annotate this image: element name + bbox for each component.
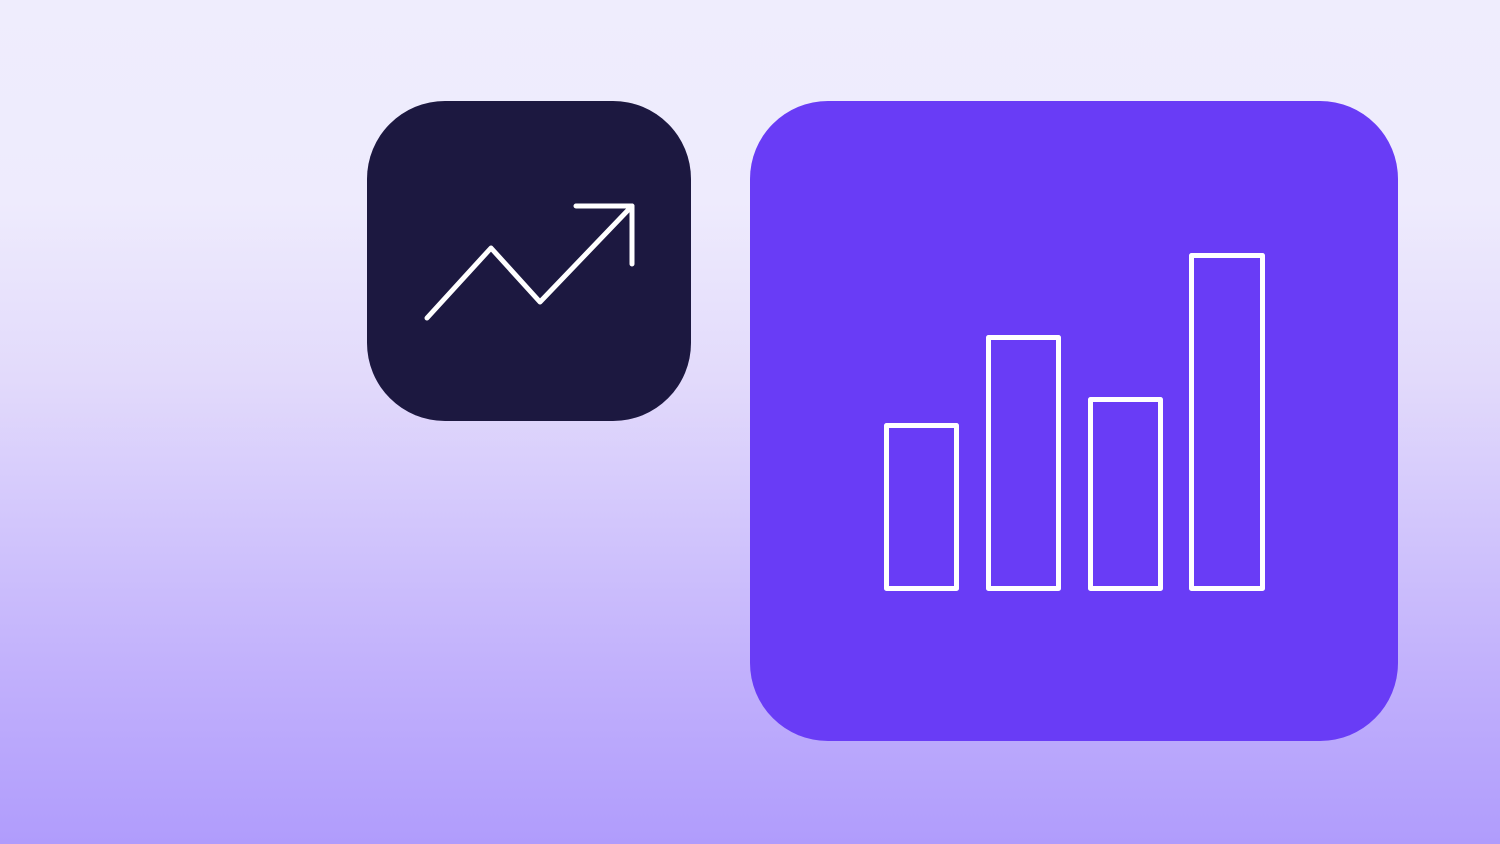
panel: trend icon tile — [367, 101, 691, 421]
panel: bar chart tile — [750, 101, 1398, 741]
icon: trending up arrow — [424, 204, 634, 320]
bar chart icon — [884, 253, 1265, 591]
